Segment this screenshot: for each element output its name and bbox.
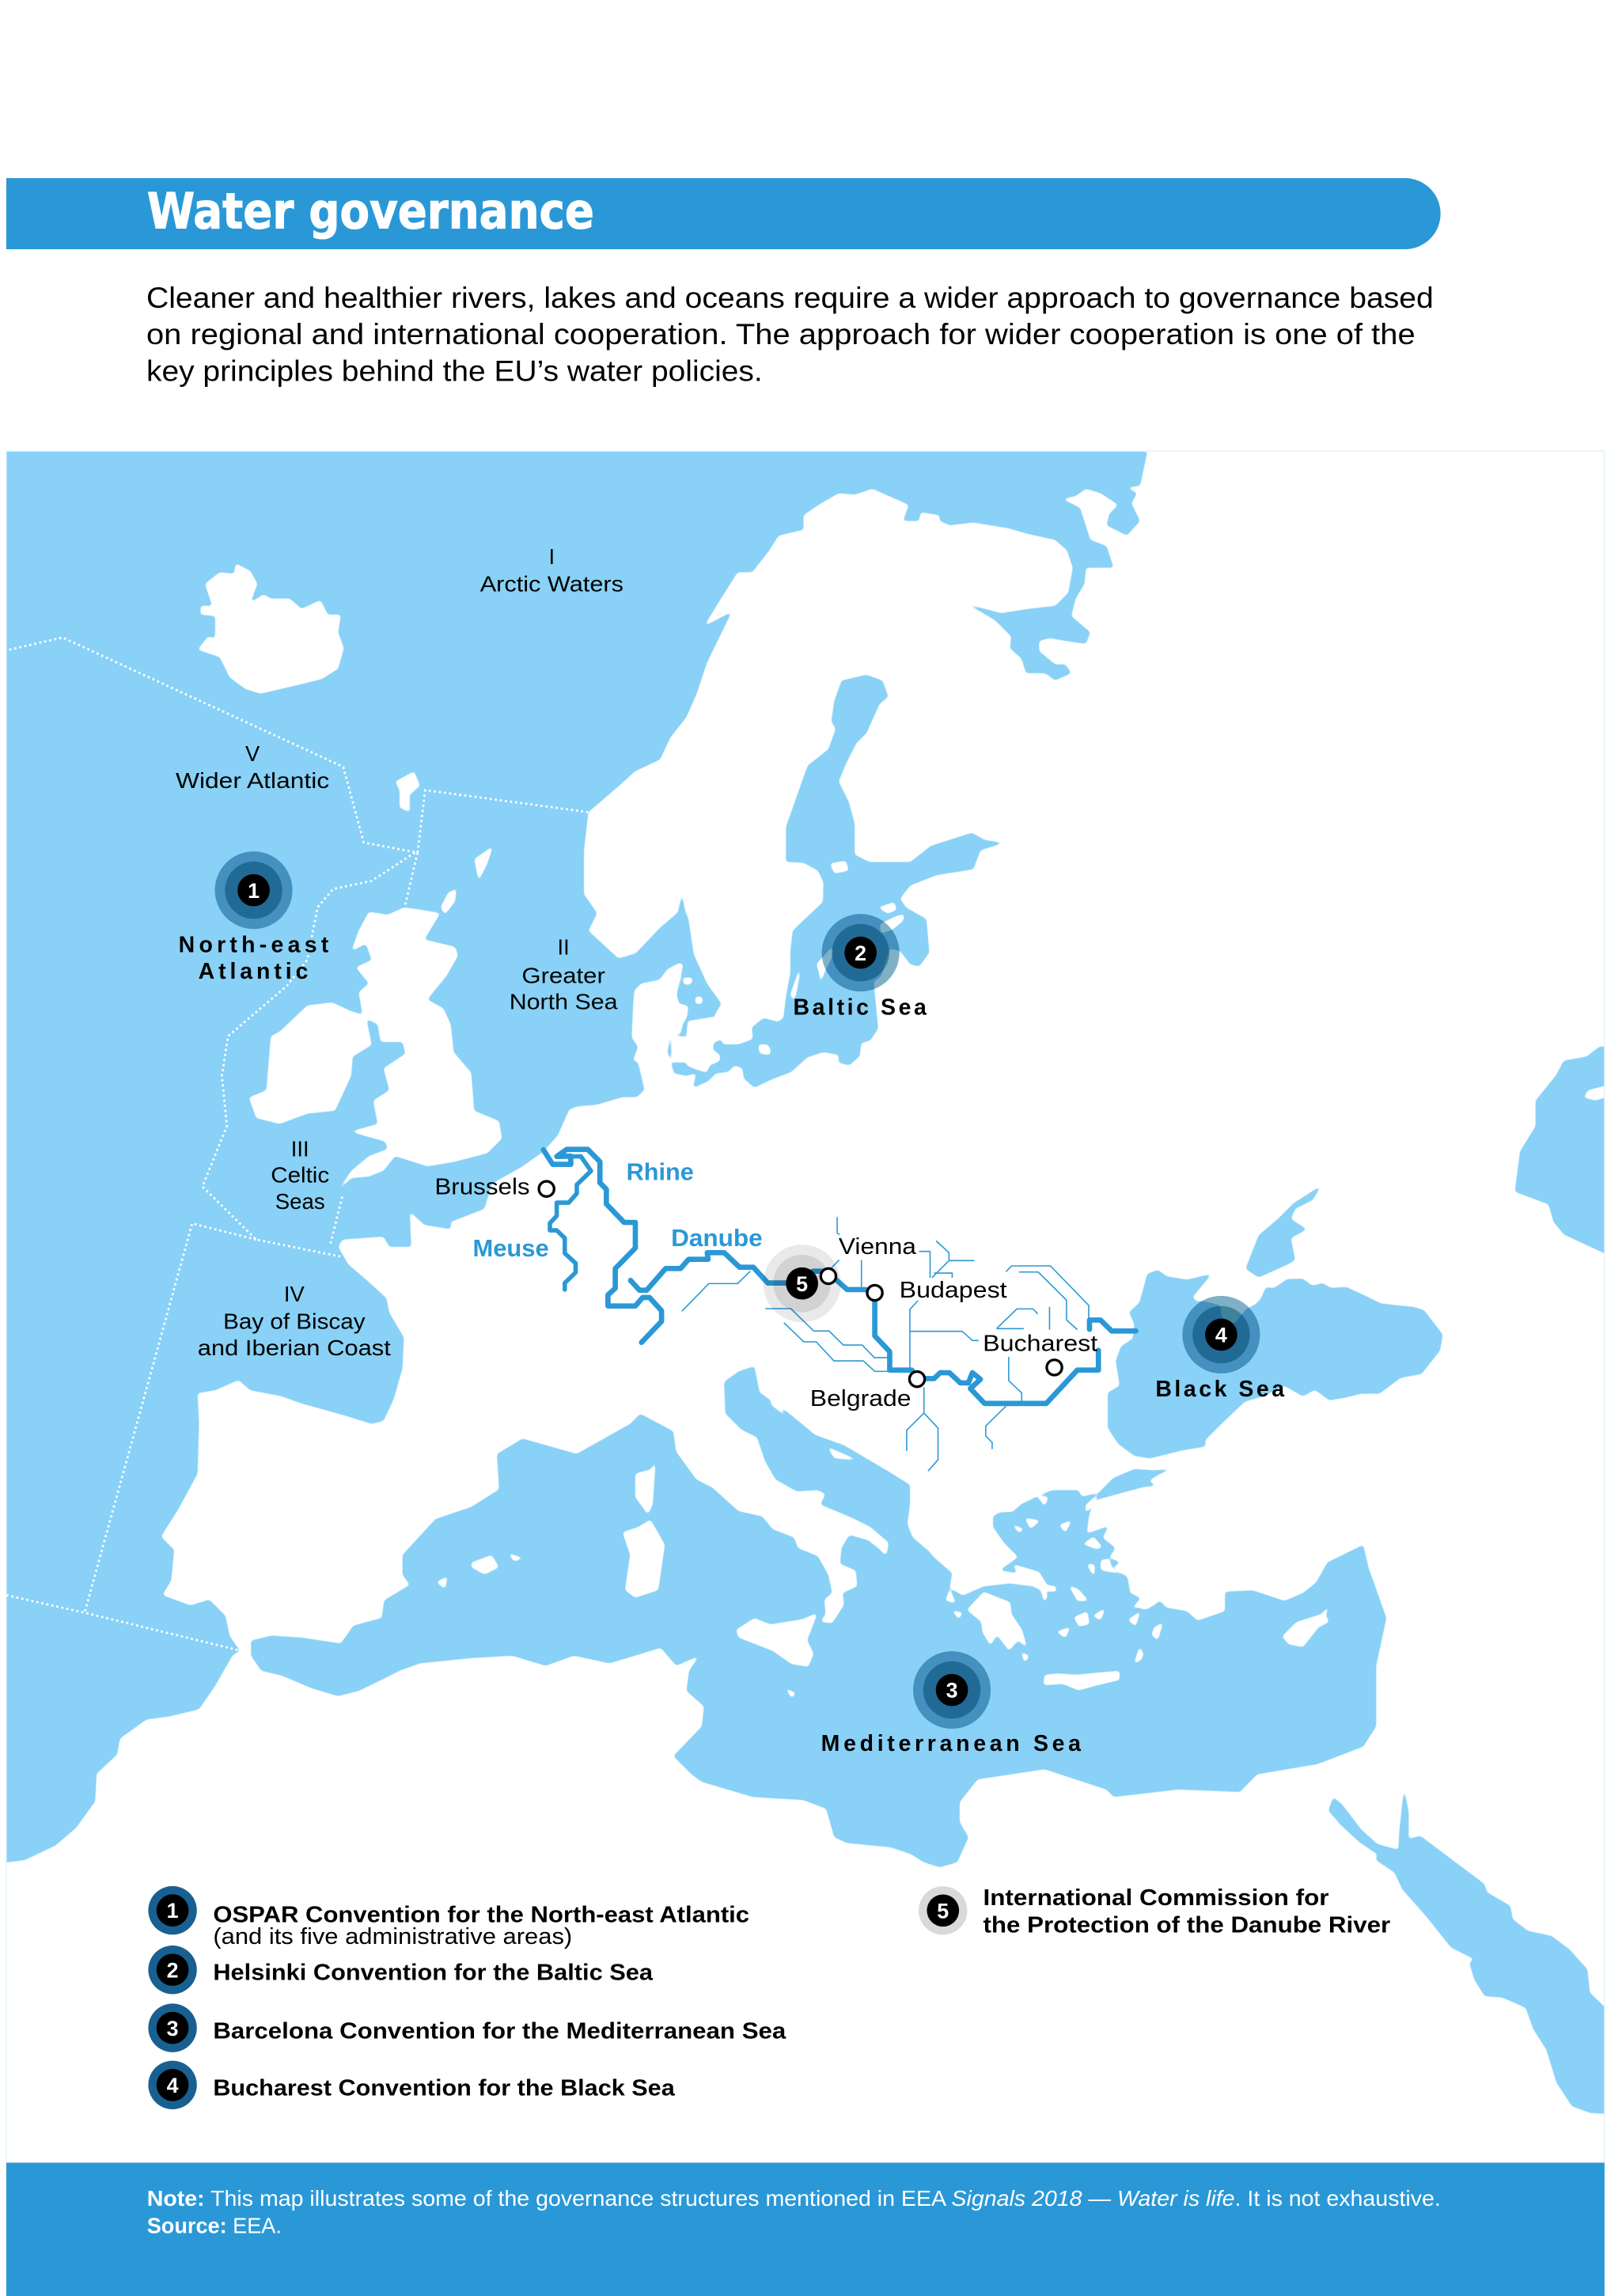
legend item 5 (919, 1885, 1390, 1938)
legend item 3: 3 (167, 2017, 179, 2040)
labels: OSPAR areas: I (549, 544, 555, 569)
labels: OSPAR areas: II (558, 935, 570, 960)
intro text: key principles behind the EU’s water policies. (146, 354, 763, 388)
marker 5: Danube commission (764, 1245, 841, 1322)
legend item 1: 1 (167, 1899, 179, 1923)
labels: regional seas (179, 933, 1285, 1756)
labels: OSPAR areas: and Iberian Coast (198, 1336, 391, 1360)
labels: cities: Bucharest (983, 1331, 1097, 1356)
labels: rivers: Danube (671, 1224, 763, 1252)
legend item 1: OSPAR Convention for the North-east Atlantic (213, 1902, 749, 1927)
marker 5: Danube commission: 5 (796, 1272, 808, 1296)
legend item 3 (148, 2003, 786, 2052)
marker 2: Baltic Sea: 2 (855, 942, 866, 965)
labels: OSPAR areas: IV (284, 1282, 305, 1306)
labels: OSPAR areas (176, 544, 623, 1360)
labels: regional seas: Mediterranean Sea (821, 1731, 1082, 1756)
labels: OSPAR areas: III (291, 1136, 309, 1161)
labels: cities: Belgrade (810, 1386, 911, 1411)
marker 3: Mediterranean Sea (913, 1651, 991, 1729)
title banner (6, 178, 1441, 249)
legend item 4: Bucharest Convention for the Black Sea (213, 2075, 676, 2101)
sea: Red Sea (1328, 1786, 1607, 2115)
river: Danube (631, 1252, 1098, 1404)
tributaries (682, 1217, 1089, 1471)
river: Rhine (544, 1150, 661, 1343)
note and source text (147, 2186, 1441, 2237)
marker 3: Mediterranean Sea: 3 (946, 1679, 958, 1703)
legend item 2: Helsinki Convention for the Baltic Sea (213, 1961, 654, 1986)
footer panel (6, 2162, 1605, 2296)
sea: Caspian (1514, 1047, 1607, 1259)
marker 2: Baltic Sea (822, 914, 900, 991)
note and source text: Note: This map illustrates some of the governance structures mentioned in EEA Signals 2018 — Water is life . It is not exhaustive. (147, 2186, 1441, 2211)
legend (148, 1885, 1390, 2109)
river: Meuse (550, 1157, 591, 1290)
labels: OSPAR areas: Arctic Waters (480, 571, 623, 596)
sea: Atlantic, Arctic, North Sea and Baltic (0, 451, 1147, 1865)
labels: cities: Brussels (434, 1174, 530, 1199)
city markers (539, 1181, 1062, 1387)
sea: Mediterranean (251, 1366, 1386, 1867)
labels: cities (434, 1174, 1097, 1411)
legend item 5: 5 (937, 1899, 949, 1923)
labels: cities: Vienna (839, 1234, 916, 1260)
marker 1: North-east Atlantic: 1 (248, 879, 260, 903)
river: Danube delta (1090, 1320, 1136, 1331)
labels: OSPAR areas: V (245, 741, 260, 766)
labels: OSPAR areas: Celtic (271, 1163, 329, 1188)
labels: regional seas: North-east (179, 933, 329, 958)
legend item 1: (and its five administrative areas) (213, 1924, 572, 1949)
rivers (544, 1150, 1136, 1471)
land: islands (198, 563, 1329, 1699)
marker 4: Black Sea: 4 (1215, 1324, 1227, 1347)
labels: cities: Budapest (900, 1278, 1007, 1303)
labels: OSPAR areas: Greater (521, 963, 605, 987)
labels: rivers: Meuse (472, 1234, 549, 1262)
labels: regional seas: Baltic Sea (794, 995, 927, 1021)
labels: OSPAR areas: North Sea (510, 990, 618, 1014)
labels: rivers (472, 1158, 763, 1262)
legend item 5: the Protection of the Danube River (983, 1913, 1390, 1938)
legend item 3: Barcelona Convention for the Mediterranean Sea (213, 2019, 786, 2044)
panel: map (0, 439, 1607, 2166)
map frame (6, 451, 1605, 2163)
legend item 2: 2 (167, 1958, 179, 1982)
intro text (146, 281, 1434, 388)
marker 4: Black Sea (1182, 1296, 1260, 1373)
marker 1: North-east Atlantic (215, 851, 293, 929)
sea: Azov (1245, 1185, 1321, 1278)
title: Water governance (147, 183, 594, 241)
labels: regional seas: Atlantic (199, 959, 308, 984)
labels: OSPAR areas: Seas (275, 1189, 325, 1214)
note and source text: Source: EEA. (147, 2213, 282, 2237)
intro text: Cleaner and healthier rivers, lakes and oceans require a wider approach to governance based (146, 281, 1434, 314)
labels: OSPAR areas: Bay of Biscay (223, 1309, 366, 1334)
legend item 4: 4 (167, 2074, 179, 2097)
intro text: on regional and international cooperation. The approach for wider cooperation is one of the (146, 317, 1416, 350)
maritime boundaries (6, 638, 589, 1650)
seas and land base (0, 439, 1607, 2166)
legend item 1 (148, 1886, 749, 1949)
legend item 2 (148, 1946, 654, 1994)
legend item 5: International Commission for (983, 1885, 1329, 1911)
legend item 4 (148, 2061, 676, 2109)
sea: Black Sea (1108, 1270, 1442, 1458)
labels: regional seas: Black Sea (1155, 1377, 1285, 1402)
labels: OSPAR areas: Wider Atlantic (176, 768, 329, 793)
labels: rivers: Rhine (627, 1158, 694, 1186)
